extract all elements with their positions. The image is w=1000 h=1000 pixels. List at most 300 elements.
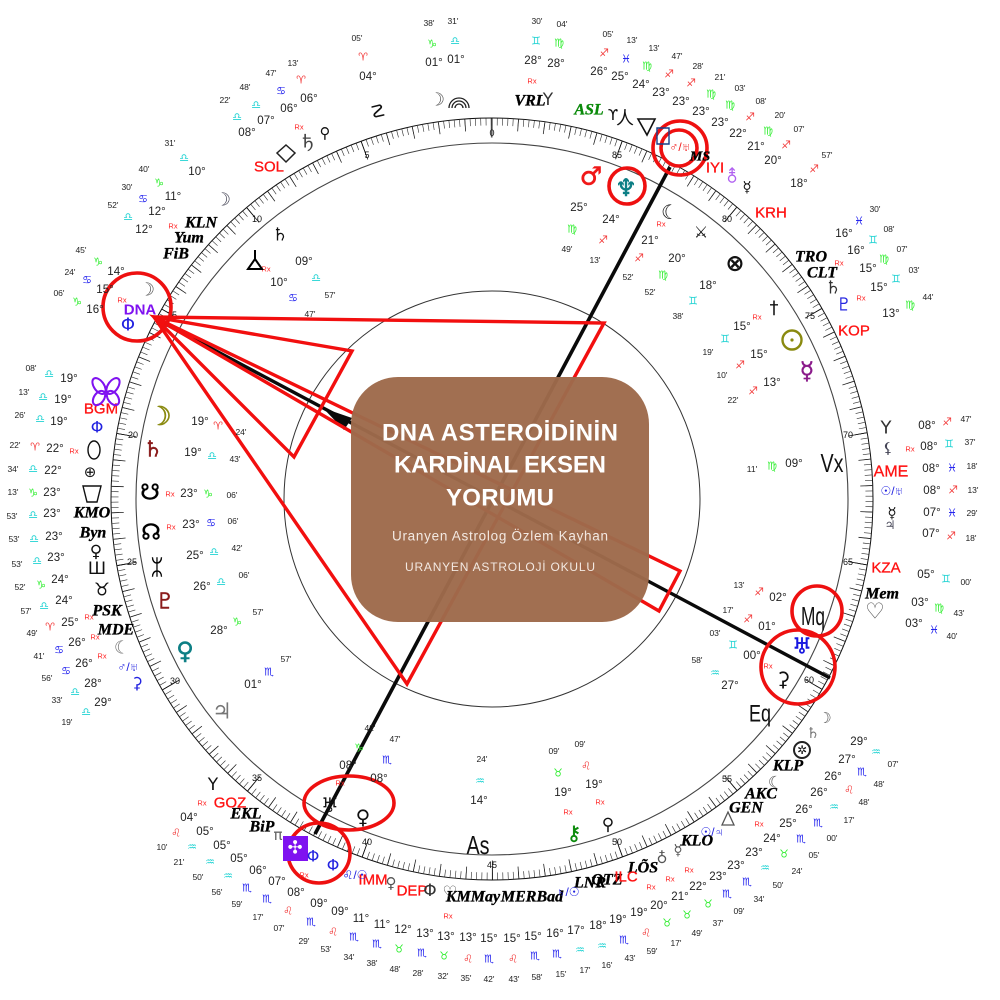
positions: outer right: 40'	[946, 631, 958, 641]
asteroid names: red: GOZ	[214, 794, 246, 812]
right glyphs: ♄	[806, 724, 820, 742]
positions: outer left: ♎	[28, 508, 38, 522]
retrograde markers: Rx	[261, 264, 271, 274]
positions: outer bottom left: 11°	[374, 919, 390, 931]
positions: inner right: 13'	[589, 255, 601, 265]
axis line: black diagonal	[315, 167, 670, 834]
bottom glyphs: ☉/♃	[700, 825, 724, 839]
ring degree numbers: 55	[722, 774, 732, 784]
positions: inner right: 52'	[622, 272, 634, 282]
positions: outer bottom left: 53'	[320, 944, 332, 954]
planet and point glyphs	[83, 90, 904, 903]
positions: outer left: ♋	[61, 664, 71, 678]
positions: outer top left	[53, 16, 465, 316]
positions: outer bottom left: 05°	[230, 853, 248, 865]
positions: outer top right	[524, 16, 934, 320]
positions: inner left: 10°	[270, 277, 288, 289]
asteroid names: calligraphic black: TRO	[795, 248, 827, 266]
main planets: ♇	[155, 590, 175, 614]
positions: outer top right: 25°	[611, 71, 629, 83]
positions: outer left: 19°	[60, 373, 78, 385]
positions: outer bottom left: 09°	[331, 906, 349, 918]
positions: outer right: 13'	[967, 485, 979, 495]
positions: outer bottom right: 17'	[843, 815, 855, 825]
positions: outer left: 57'	[20, 606, 32, 616]
positions: outer top right: 22°	[729, 128, 747, 140]
author line: Uranyen Astrolog Özlem Kayhan	[392, 528, 608, 544]
positions: outer top left: 12°	[135, 224, 153, 236]
angles: Vx	[820, 448, 844, 478]
positions: outer right: ♓	[947, 462, 957, 474]
positions: outer bottom right: ♌	[844, 784, 854, 796]
ring degree numbers: 70	[843, 430, 853, 440]
retrograde markers: Rx	[69, 446, 79, 456]
positions: outer top left: 10°	[188, 166, 206, 178]
retrograde markers: Rx	[905, 444, 915, 454]
positions: outer left: 23°	[45, 531, 63, 543]
positions: outer bottom left: 35'	[460, 973, 472, 983]
positions: outer bottom right: ♒	[871, 746, 881, 758]
positions: inner right: 25°	[570, 202, 588, 214]
positions: outer bottom left: 13°	[459, 932, 477, 944]
positions: outer right	[905, 414, 979, 641]
retrograde markers: Rx	[84, 612, 94, 622]
positions: outer bottom left	[156, 812, 498, 984]
positions: outer bottom right: 17'	[579, 965, 591, 975]
positions: outer bottom right: ♏	[742, 876, 752, 888]
asteroid names: red	[84, 158, 908, 900]
asteroid names: calligraphic black: PSK	[91, 602, 123, 620]
positions: inner left: 47'	[304, 309, 316, 319]
positions: outer right: ♊	[944, 438, 954, 450]
angles: As	[466, 830, 490, 860]
positions: inner left: 57'	[252, 607, 264, 617]
bottom glyphs: Φ	[423, 881, 437, 901]
positions: outer bottom left: 07'	[273, 923, 285, 933]
positions: inner right: ♐	[598, 234, 608, 246]
positions: outer right: 08°	[918, 420, 936, 432]
positions: outer bottom right: 17°	[567, 925, 585, 937]
red highlight circles	[103, 121, 842, 883]
right glyphs: ⚸	[882, 439, 894, 457]
asteroid names: calligraphic black: BiP	[249, 818, 275, 836]
positions: outer top left: 06'	[53, 288, 65, 298]
positions: outer bottom right: 16°	[546, 928, 564, 940]
positions: inner right: 58'	[691, 655, 703, 665]
asteroid names: calligraphic black: MERBad	[500, 888, 564, 906]
positions: outer bottom left: 13°	[416, 928, 434, 940]
positions: outer top left: ♑	[72, 296, 82, 308]
positions: outer right: 47'	[960, 414, 972, 424]
positions: outer bottom left: 17'	[252, 912, 264, 922]
bottom glyphs: ♡	[442, 883, 458, 903]
positions: outer bottom right: 19°	[609, 914, 627, 926]
positions: inner right: 49'	[561, 244, 573, 254]
positions: outer top right: ♍	[763, 124, 773, 138]
positions: outer right: ♐	[948, 484, 958, 496]
ring degree numbers: 85	[612, 150, 622, 160]
positions: outer top right: 20'	[774, 110, 786, 120]
positions: inner left: 09°	[295, 256, 313, 268]
top glyphs: ☾	[661, 200, 679, 224]
positions: outer left: 53'	[6, 511, 18, 521]
positions: outer bottom right: 50'	[772, 880, 784, 890]
positions: outer top left: 05'	[351, 33, 363, 43]
positions: outer bottom right: 24°	[763, 833, 781, 845]
positions: outer top right: 20°	[764, 155, 782, 167]
bottom glyphs: ☿	[673, 841, 683, 859]
positions: inner bottom: ♉	[553, 766, 563, 780]
left glyphs: ♂/♅	[117, 660, 139, 674]
positions: outer left: 33'	[51, 695, 63, 705]
positions: inner right: ♐	[743, 612, 753, 626]
positions: inner left: 24'	[235, 427, 247, 437]
bottom glyphs: ♅	[321, 793, 339, 817]
positions: inner left: ♎	[209, 546, 219, 558]
positions: outer bottom left: 10'	[156, 842, 168, 852]
positions: inner right: ♒	[710, 666, 720, 680]
positions: outer top right: ♊	[868, 234, 878, 246]
retrograde markers: Rx	[294, 122, 304, 132]
positions: outer left: ♑	[28, 486, 38, 500]
positions: inner left: 06'	[226, 490, 238, 500]
asteroid names: red: AME	[874, 464, 908, 480]
positions: outer right: ♐	[942, 416, 952, 428]
positions: outer top left: ♎	[179, 152, 189, 164]
bottom glyphs: Φ	[307, 846, 319, 866]
positions: outer top left: 08°	[238, 127, 256, 139]
positions: outer top right: 44'	[922, 292, 934, 302]
asteroid names: calligraphic black: QTZ	[591, 872, 623, 888]
positions: outer left: ♎	[81, 706, 91, 718]
positions: outer left: 56'	[41, 673, 53, 683]
positions: inner right: 13'	[733, 580, 745, 590]
positions: inner bottom: 09'	[574, 739, 586, 749]
positions: outer right: 05°	[917, 569, 935, 581]
positions: outer bottom left: ♒	[205, 856, 215, 868]
positions: inner bottom: 08°	[370, 773, 388, 785]
positions: outer bottom left: ♏	[262, 892, 272, 906]
left glyphs: ♉	[94, 580, 110, 600]
positions: inner left	[180, 256, 336, 691]
positions: outer bottom right: 29°	[850, 736, 868, 748]
positions: outer left: 13'	[18, 387, 30, 397]
positions: outer left: 26°	[68, 637, 86, 649]
asteroid names: red: KRH	[755, 204, 787, 222]
positions: outer top left: 45'	[75, 245, 87, 255]
positions: outer top left: 04°	[359, 71, 377, 83]
asteroid names: calligraphic black: KMO	[73, 504, 111, 522]
positions: outer top right: 16°	[847, 245, 865, 257]
positions: outer left: 28°	[84, 678, 102, 690]
positions: inner right: 01°	[758, 621, 776, 633]
positions: inner bottom: 47'	[389, 734, 401, 744]
positions: inner bottom: ♑	[354, 742, 364, 754]
positions: inner right: 00°	[743, 650, 761, 662]
positions: outer bottom left: 05°	[196, 826, 214, 838]
positions: outer left: ♎	[38, 390, 48, 404]
top glyphs	[215, 90, 852, 318]
axis line: black from DNA to lower right	[158, 320, 830, 678]
angles: Eq	[749, 700, 771, 728]
retrograde markers: Rx	[527, 76, 537, 86]
positions: outer left: ♎	[29, 532, 39, 546]
bottom glyphs: ♄/☉	[556, 885, 580, 899]
positions: outer bottom right: 48'	[873, 779, 885, 789]
positions: outer right: 37'	[964, 437, 976, 447]
positions: outer bottom right: 49'	[691, 928, 703, 938]
positions: outer top left: 14°	[107, 266, 125, 278]
top glyphs: ☽	[215, 190, 231, 210]
ring degree numbers: 80	[722, 214, 732, 224]
retrograde markers: Rx	[165, 490, 175, 498]
positions: outer bottom left: 29'	[298, 936, 310, 946]
positions: inner right: ♍	[567, 222, 577, 236]
retrograde markers: Rx	[763, 662, 773, 670]
main planets: ☽	[148, 402, 172, 432]
bottom glyphs	[273, 793, 734, 903]
positions: outer bottom left: 28'	[412, 968, 424, 978]
positions: outer top right: 03'	[908, 265, 920, 275]
positions: outer top right: ♓	[854, 214, 864, 228]
positions: outer bottom right: 48'	[858, 797, 870, 807]
ring degree numbers: 75	[805, 311, 815, 321]
left glyphs: ⊕	[84, 463, 96, 481]
DNA label: DNA	[124, 302, 156, 318]
positions: outer top right: 23°	[692, 106, 710, 118]
left glyphs: Ш	[88, 559, 106, 579]
positions: inner right: 09°	[785, 458, 803, 470]
positions: outer top left: 12°	[148, 206, 166, 218]
inner circle	[284, 291, 700, 707]
sun glyph	[782, 330, 802, 350]
retrograde markers: Rx	[595, 798, 605, 806]
positions: inner left: 23°	[182, 519, 200, 531]
positions: outer left: 29°	[94, 697, 112, 709]
positions: inner right: 15°	[750, 349, 768, 361]
positions: inner left: 25°	[186, 550, 204, 562]
positions: outer top left: ♋	[138, 192, 148, 206]
positions: inner bottom: ♒	[475, 774, 485, 788]
positions: outer left	[6, 363, 112, 727]
positions: outer top right: 23°	[652, 87, 670, 99]
positions: outer top right: ♓	[621, 52, 631, 66]
positions: inner left: ♋	[206, 516, 216, 530]
positions: outer top left: 52'	[107, 200, 119, 210]
positions: outer bottom right: ♒	[597, 940, 607, 952]
positions: outer bottom right: 43'	[624, 953, 636, 963]
positions: outer top left: 31'	[164, 138, 176, 148]
positions: outer left: 22'	[9, 440, 21, 450]
positions: inner right: 19'	[702, 347, 714, 357]
positions: outer bottom left: 08°	[287, 887, 305, 899]
positions: outer bottom left: ♒	[187, 840, 197, 854]
positions: outer bottom right: 25°	[779, 818, 797, 830]
asteroid names: calligraphic black: KMMay	[445, 888, 501, 906]
positions: outer top right: ♍	[725, 98, 735, 112]
positions: inner right: 13°	[763, 377, 781, 389]
main planets: ☊	[141, 520, 161, 546]
positions: inner left: 43'	[229, 454, 241, 464]
main planets: ♀	[176, 637, 194, 665]
positions: outer left: 52'	[14, 582, 26, 592]
retrograde markers: Rx	[166, 522, 176, 532]
right glyphs: ♃	[885, 518, 895, 532]
positions: inner left: ♈	[213, 420, 223, 432]
positions: outer top right: 26°	[590, 66, 608, 78]
positions: outer top right: ♐	[809, 162, 819, 176]
positions: outer top left: ♎	[123, 210, 133, 224]
top glyphs: ☿	[742, 178, 752, 196]
positions: outer top right: 23°	[711, 117, 729, 129]
asteroid names: red: SOL	[254, 158, 284, 176]
positions: outer top left: 06°	[280, 103, 298, 115]
positions: outer right: 08°	[922, 463, 940, 475]
positions: outer bottom right: 16'	[601, 960, 613, 970]
positions: inner right: ♍	[767, 460, 777, 472]
positions: outer top left: ♋	[276, 84, 286, 98]
positions: inner left: ♏	[264, 666, 274, 678]
positions: outer top left: 22'	[219, 95, 231, 105]
positions: inner right: ♍	[658, 268, 668, 282]
positions: outer bottom right: ♏	[796, 832, 806, 846]
positions: outer top left: 06°	[300, 93, 318, 105]
positions: outer bottom right: 59'	[646, 946, 658, 956]
positions: outer bottom left: ♏	[242, 882, 252, 894]
positions: outer top right: 04'	[556, 19, 568, 29]
asteroid names: red: KZA	[871, 560, 901, 576]
positions: inner left: 57'	[280, 654, 292, 664]
ring degree numbers: 5	[364, 150, 370, 160]
retrograde markers: Rx	[563, 808, 573, 816]
positions: outer top left: 38'	[423, 18, 435, 28]
main planets: ♅	[792, 634, 812, 660]
ring degree numbers: 15	[167, 310, 177, 320]
positions: outer bottom right: ♏	[530, 950, 540, 962]
positions: inner left: 23°	[180, 488, 198, 500]
left glyphs: ♀	[90, 542, 102, 562]
positions: outer bottom left: ♌	[283, 904, 293, 918]
positions: outer left: 41'	[33, 651, 45, 661]
left glyphs: ☾	[114, 638, 130, 658]
positions: inner right: 22'	[727, 395, 739, 405]
left glyphs: Φ	[121, 314, 135, 336]
positions: outer left: 13'	[7, 487, 19, 497]
positions: outer top left: 16°	[86, 304, 104, 316]
positions: outer bottom right: ♏	[619, 934, 629, 946]
positions: outer bottom right: 23°	[727, 860, 745, 872]
main planets: ⚳	[776, 667, 790, 691]
retrograde markers: Rx	[834, 258, 844, 268]
bottom glyphs: ♀	[356, 805, 370, 829]
positions: outer right: ♓	[947, 506, 957, 520]
bottom glyphs: π	[273, 826, 283, 844]
top glyphs: ♄	[825, 278, 841, 298]
positions: outer top right: 13'	[626, 35, 638, 45]
positions: outer top right: ♍	[879, 252, 889, 266]
positions: outer top right: 28°	[524, 55, 542, 67]
positions: inner right: ♐	[748, 384, 758, 398]
ring degree numbers: 0	[489, 128, 495, 138]
positions: outer bottom left: 06°	[249, 865, 267, 877]
main planets: ᛯ	[150, 556, 164, 580]
positions: outer top right: 13°	[882, 308, 900, 320]
main planets: ♂	[580, 162, 602, 190]
positions: outer bottom left: 59'	[231, 899, 243, 909]
positions: outer bottom left: 50'	[192, 872, 204, 882]
positions: outer bottom left: 15°	[480, 933, 498, 945]
positions: outer bottom right: 23°	[745, 847, 763, 859]
positions: outer bottom right: 23°	[709, 871, 727, 883]
positions: outer left: 26'	[14, 410, 26, 420]
positions: inner left: 19°	[184, 447, 202, 459]
positions: inner right: ♐	[735, 358, 745, 372]
positions: inner right: 10'	[716, 370, 728, 380]
main planets: ♄	[143, 438, 163, 462]
positions: outer bottom right: 26°	[810, 787, 828, 799]
asteroid names: red: DEP	[397, 882, 427, 900]
top glyphs: ♂/♅	[669, 140, 691, 154]
positions: outer top right: 16°	[835, 228, 853, 240]
left glyphs: Y	[207, 775, 219, 795]
positions: outer left: 23°	[47, 552, 65, 564]
positions: inner left: ♑	[232, 616, 242, 628]
positions: outer top right: 57'	[821, 150, 833, 160]
main planets: ☿	[800, 357, 814, 385]
positions: outer bottom right: 19°	[630, 907, 648, 919]
positions: outer top left: 48'	[239, 82, 251, 92]
positions: outer bottom right: 18°	[589, 920, 607, 932]
positions: outer top left: ♑	[427, 38, 437, 50]
retrograde markers: Rx	[97, 652, 107, 660]
positions: outer top right: 03'	[734, 83, 746, 93]
positions: outer bottom right: 09'	[733, 906, 745, 916]
positions: outer top left: 13'	[287, 58, 299, 68]
positions: outer left: 19°	[50, 416, 68, 428]
asteroid names: calligraphic black: GEN	[729, 800, 764, 816]
positions: outer top left: ♑	[93, 256, 103, 268]
top glyphs: ☡	[370, 102, 386, 122]
bottom glyphs: ♁	[656, 849, 668, 867]
positions: outer right: ♊	[941, 572, 951, 586]
ring degree numbers: 60	[804, 675, 814, 685]
right glyphs: ♡	[865, 600, 885, 624]
asteroid names: calligraphic black: FiB	[162, 246, 189, 262]
positions: inner right: 20°	[668, 253, 686, 265]
positions: outer bottom right: 58'	[531, 972, 543, 982]
positions: outer bottom left: ♏	[349, 930, 359, 944]
positions: inner right: 03'	[709, 628, 721, 638]
positions: outer bottom right: 24'	[791, 866, 803, 876]
positions: inner right: ♊	[720, 332, 730, 346]
bottom glyphs: ⚲	[602, 815, 614, 835]
bottom glyphs: ♀	[386, 874, 396, 892]
positions: outer bottom right: 05'	[808, 850, 820, 860]
positions: outer top right: 28°	[547, 58, 565, 70]
positions: outer top right: ♐	[664, 68, 674, 80]
positions: inner bottom: 14°	[470, 795, 488, 807]
positions: outer bottom right: ♒	[760, 862, 770, 874]
top glyphs: ♄	[272, 224, 288, 246]
positions: outer left: 53'	[11, 559, 23, 569]
positions: outer top left: ♎	[450, 34, 460, 48]
positions: outer top left: ♑	[154, 176, 164, 190]
angles: Mq	[801, 601, 825, 631]
positions: outer bottom right: 27°	[838, 754, 856, 766]
ring degree numbers: 25	[127, 557, 137, 567]
title	[382, 420, 618, 512]
bottom glyphs: ♌/☉	[343, 868, 367, 882]
